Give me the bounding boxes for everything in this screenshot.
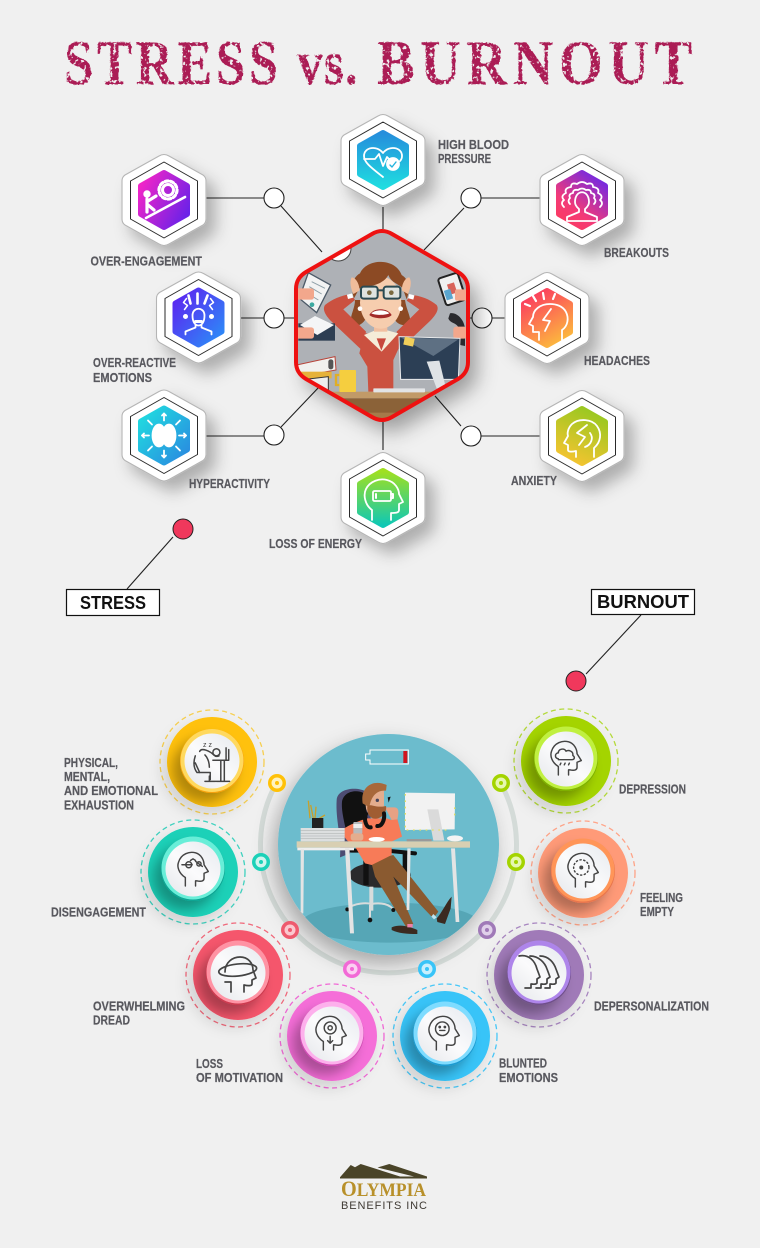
circle: depression [514,709,618,813]
wall clock [332,248,352,262]
labels: stress symptoms: HYPERACTIVITY [189,476,270,491]
ring around burnout illustration [260,782,516,973]
tablet [438,272,466,306]
labels: stress symptoms: OVER-REACTIVE [93,355,176,370]
mouse and papers [369,837,385,842]
badge: breakouts [540,154,624,246]
circle: exhaustion: z z [203,742,212,749]
badge: over-engagement [122,154,206,246]
keyboard [373,388,425,392]
labels: burnout symptoms: LOSS [196,1056,223,1071]
node: exhaustion [268,774,286,792]
labels: burnout symptoms: AND EMOTIONAL [64,783,158,798]
labels: burnout symptoms: EMPTY [640,904,674,919]
labels: burnout symptoms: DEPRESSION [619,782,686,796]
node: depersonalization [478,921,496,939]
title: BURNOUT [377,28,692,99]
burnout tag with connector: BURNOUT [597,592,689,612]
icon: brain with arrows [142,414,186,458]
central circle: burned-out man [278,734,499,955]
man [340,783,452,934]
labels: burnout symptoms: OVERWHELMING [93,998,185,1014]
badge: anxiety [540,390,624,482]
labels: burnout symptoms: DISENGAGEMENT [51,904,146,920]
monitor [405,793,463,841]
title: vs. [297,27,358,98]
icon: head with low battery [365,479,403,520]
labels: stress symptoms [90,137,669,551]
labels: stress symptoms: EMOTIONS [93,370,152,385]
node: blunted [418,960,436,978]
woman [324,262,438,392]
labels: stress symptoms: HIGH BLOOD [438,137,509,152]
node: depression [492,774,510,792]
labels: burnout symptoms: PHYSICAL, [64,755,118,770]
circle: depersonalization [487,923,591,1027]
badge: high blood pressure [341,114,425,206]
icon: head with rain cloud [551,741,581,775]
icon: head with orbit [218,957,257,992]
binders [295,357,336,392]
envelope [298,316,335,341]
node dots: stress hub [264,188,492,446]
paper stack and pens [301,801,345,841]
labels: burnout symptoms: EXHAUSTION [64,798,134,812]
icon: asleep at desk [194,748,230,781]
burnout tag with connector [566,590,694,691]
icon: agitated person [184,294,214,334]
circle: loss of motivation [280,984,384,1088]
labels: stress symptoms: OVER-ENGAGEMENT [90,254,202,268]
circle: feeling empty [531,821,635,925]
battery [366,750,408,764]
labels: burnout symptoms: OF MOTIVATION [196,1070,283,1085]
monitor [399,337,460,388]
labels: burnout symptoms [51,755,709,1085]
stress tag with connector [66,519,193,616]
labels: burnout symptoms: EMOTIONS [499,1070,558,1085]
labels: burnout symptoms: DREAD [93,1012,130,1028]
icon: three overlapping profiles [519,956,559,988]
icon: head with unfocused eyes [178,852,208,886]
logo mountains [340,1164,427,1177]
icon: head with breakout [562,182,602,221]
icon: heart with pulse [364,148,402,177]
phone [448,313,467,346]
icon: head with target and down arrow [316,1016,346,1050]
clipboard [293,273,331,313]
icon: head with spiral bolt [564,420,600,457]
labels: burnout symptoms: FEELING [640,890,683,905]
title: STRESS [64,27,278,98]
node: dread [281,921,299,939]
logo subline: BENEFITS INC [341,1200,427,1212]
node: disengagement [252,853,270,871]
labels: stress symptoms: LOSS OF ENERGY [269,536,362,551]
labels: burnout symptoms: DEPERSONALIZATION [594,998,709,1014]
labels: burnout symptoms: MENTAL, [64,769,110,784]
circle: overwhelming dread [186,923,290,1027]
circle: blunted emotions [393,984,497,1088]
node: feeling empty [507,853,525,871]
desk [332,392,432,418]
logo wordmark: OLYMPIA [341,1176,426,1201]
icon: head with neutral face [429,1016,459,1050]
icon: head with dotted circle [568,853,598,887]
icon: pushing gear uphill [144,181,185,218]
circle: disengagement [141,820,245,924]
office chair [336,789,415,922]
labels: stress symptoms: BREAKOUTS [604,245,669,260]
logo: Olympia Benefits Inc [340,1164,427,1212]
labels: stress symptoms: PRESSURE [438,151,491,166]
badge: headaches [505,272,589,364]
badge: hyperactivity [122,390,206,481]
labels: stress symptoms: HEADACHES [584,353,650,368]
stress tag with connector: STRESS [80,593,146,613]
labels: stress symptoms: ANXIETY [511,473,557,488]
badge: loss of energy [341,452,425,544]
icon: head with lightning [525,293,568,340]
connectors: stress hub [206,198,540,450]
floor [302,903,478,943]
node: motivation [343,960,361,978]
labels: burnout symptoms: BLUNTED [499,1056,547,1070]
badge: over-reactive emotions [156,272,240,363]
circle: exhaustion [160,710,264,814]
desk [297,841,470,933]
central hexagon: stressed woman [280,231,480,425]
mug [336,370,356,392]
title [64,27,692,99]
